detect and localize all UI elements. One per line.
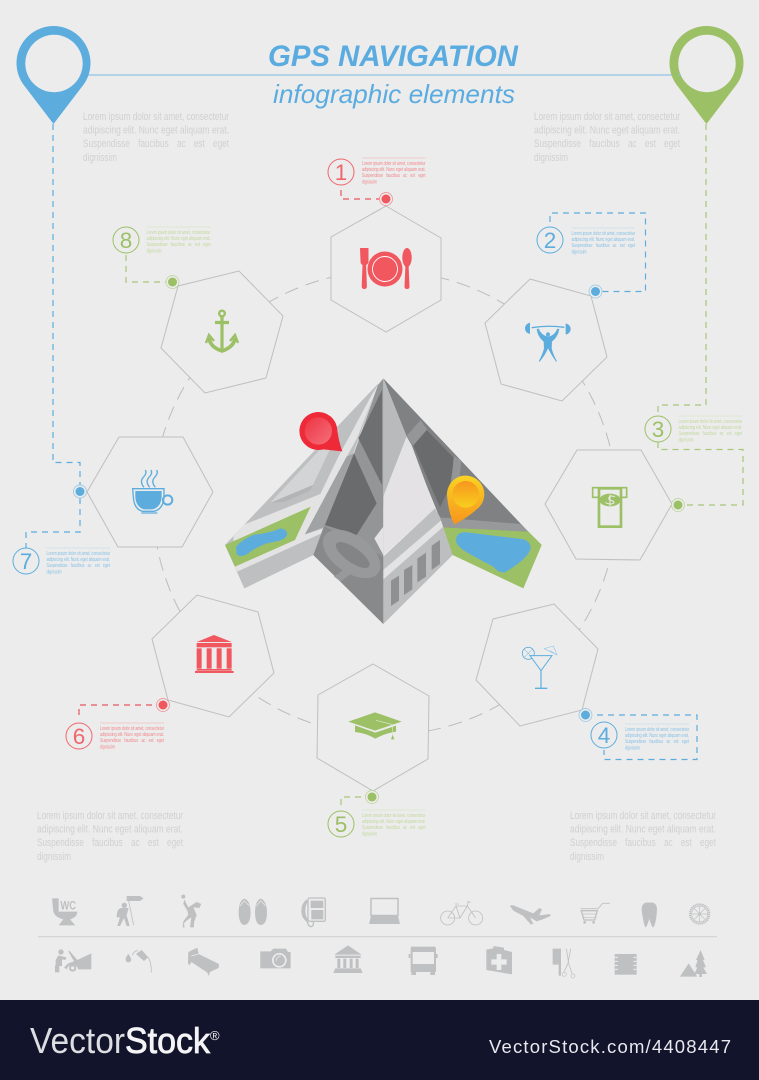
icon: bank xyxy=(333,945,363,973)
hexagon 4 xyxy=(476,604,598,726)
icon: coffee cup xyxy=(133,470,172,513)
hexagon 3 xyxy=(545,450,672,560)
icon row: top xyxy=(52,895,709,927)
caption 7: Suspendisse faucibus ac est eget xyxy=(46,563,110,569)
number 4 xyxy=(591,722,617,748)
center left face xyxy=(305,378,389,624)
marker 1 xyxy=(380,192,392,206)
number 7 xyxy=(13,548,39,574)
caption 4 xyxy=(625,724,689,752)
caption 2 xyxy=(572,228,635,256)
icon: bicycle xyxy=(441,901,483,925)
marker 2 xyxy=(589,285,602,298)
caption 7 xyxy=(46,548,110,576)
footer logo: Stock xyxy=(125,1020,211,1061)
icon: camera xyxy=(260,949,291,968)
hexagon 6 xyxy=(152,595,274,717)
caption 6: Lorem ipsum dolor sit amet, consectetur xyxy=(100,726,164,732)
text block: bottom right: dignissim xyxy=(570,851,604,863)
caption 5: Lorem ipsum dolor sit amet, consectetur xyxy=(362,813,426,819)
icon: plate and cutlery xyxy=(360,248,412,289)
caption 7: adipiscing elit. Nunc eget aliquam erat. xyxy=(46,557,110,563)
text block: top right: dignissim xyxy=(534,152,568,164)
connector 4 xyxy=(586,715,697,760)
hexagon 8 xyxy=(161,271,283,393)
number 8: 8 xyxy=(120,228,132,253)
central folded map xyxy=(225,378,542,624)
icon: anchor xyxy=(206,311,238,351)
text block: bottom right: adipiscing elit. Nunc eget aliquam erat. xyxy=(570,824,716,836)
hexagon 2 xyxy=(485,279,607,401)
marker 5 xyxy=(366,790,378,804)
number 5: 5 xyxy=(335,812,347,837)
icon: WC xyxy=(52,898,77,925)
number 2 xyxy=(537,227,563,253)
header rule xyxy=(86,74,681,76)
number 7: 7 xyxy=(20,549,32,574)
connector 7 lower xyxy=(26,498,80,548)
caption 5: Suspendisse faucibus ac est eget xyxy=(362,825,426,831)
number 6: 6 xyxy=(73,724,85,749)
caption 8: dignissim xyxy=(146,248,162,254)
icon: comb and scissors xyxy=(553,949,575,978)
caption 2: dignissim xyxy=(572,250,586,256)
icon: weightlifter xyxy=(525,323,571,362)
icon: fuel nozzle xyxy=(126,950,151,973)
caption 3: dignissim xyxy=(678,438,694,444)
marker 7 xyxy=(74,485,86,498)
caption 6: Suspendisse faucibus ac est eget xyxy=(100,738,164,744)
caption 8: Lorem ipsum dolor sit amet, consectetur xyxy=(146,230,211,236)
text block: top right: Lorem ipsum dolor sit amet, consectetur xyxy=(534,111,680,123)
icon: discus thrower xyxy=(181,895,201,927)
icon: WC: WC xyxy=(60,899,76,913)
step 5: school xyxy=(317,664,429,838)
marker 4 xyxy=(579,708,592,722)
icon: airplane xyxy=(510,905,551,924)
icon: laptop xyxy=(369,898,400,924)
text block: bottom left: adipiscing elit. Nunc eget aliquam erat. xyxy=(37,824,183,836)
icon: yellow pin xyxy=(447,476,484,524)
step 7: cafe xyxy=(13,124,213,576)
connector 2 xyxy=(550,213,646,292)
icon: tooth xyxy=(642,902,657,927)
marker 8 xyxy=(166,276,179,288)
connector 3 lower xyxy=(658,442,743,505)
caption 3 xyxy=(678,416,742,444)
caption 1: Lorem ipsum dolor sit amet, consectetur xyxy=(362,161,426,167)
step 8: harbour xyxy=(113,227,283,393)
caption 1: Suspendisse faucibus ac est eget xyxy=(362,173,426,179)
caption 8: Suspendisse faucibus ac est eget xyxy=(146,242,211,248)
caption 6: dignissim xyxy=(100,744,115,750)
footer logo: ® xyxy=(210,1028,220,1043)
text block: top right: adipiscing elit. Nunc eget aliquam erat. xyxy=(534,124,680,136)
text block: top left: adipiscing elit. Nunc eget aliquam erat. xyxy=(83,124,229,136)
caption 4: Suspendisse faucibus ac est eget xyxy=(625,739,689,745)
caption 2: Suspendisse faucibus ac est eget xyxy=(572,243,635,249)
caption 4: dignissim xyxy=(625,746,640,752)
icon: tent and tree xyxy=(680,950,707,977)
number 8 xyxy=(113,227,139,253)
icon: compass dial xyxy=(690,904,709,924)
icon: blue map pin xyxy=(16,26,90,124)
text block: top left: Lorem ipsum dolor sit amet, consectetur xyxy=(83,111,229,123)
icon: bed xyxy=(188,948,219,976)
marker 6 xyxy=(156,698,170,712)
connector 3 upper xyxy=(658,124,706,416)
connector 8 xyxy=(126,255,173,282)
icon: bus xyxy=(409,947,438,975)
caption 4: Lorem ipsum dolor sit amet, consectetur xyxy=(625,727,689,733)
connector 6 xyxy=(79,705,163,718)
connector 5 xyxy=(341,797,372,807)
icon: telephone xyxy=(301,898,325,927)
text block: top right xyxy=(534,111,680,164)
icon: graduation cap xyxy=(348,712,402,739)
hexagon 5 xyxy=(317,664,429,791)
caption 1: dignissim xyxy=(362,180,377,186)
number 3 xyxy=(645,416,671,442)
number 3: 3 xyxy=(652,417,664,442)
icon: hiker with signpost xyxy=(117,896,144,926)
caption 7: dignissim xyxy=(46,570,62,576)
caption 5: dignissim xyxy=(362,832,377,838)
marker 3 xyxy=(672,498,684,512)
title: GPS NAVIGATION xyxy=(268,40,519,73)
caption 5 xyxy=(362,810,426,838)
footer image id: VectorStock.com/4408447 xyxy=(489,1036,731,1057)
right face xyxy=(383,378,542,624)
text block: bottom left xyxy=(37,810,183,863)
icon: flip-flops xyxy=(239,899,267,925)
number 1 xyxy=(328,159,354,185)
hexagon 1 xyxy=(331,206,441,332)
caption 4: adipiscing elit. Nunc eget aliquam erat. xyxy=(625,733,689,739)
connector 1 xyxy=(341,190,386,199)
caption 6 xyxy=(100,723,164,750)
left wing xyxy=(225,383,378,588)
text block: top left xyxy=(83,111,229,164)
text block: top left: Suspendisse faucibus ac est eget xyxy=(83,138,229,150)
text block: bottom left: Lorem ipsum dolor sit amet, consectetur xyxy=(37,810,183,822)
icon: red pin xyxy=(299,412,342,451)
footer logo xyxy=(30,1020,220,1061)
caption 2: adipiscing elit. Nunc eget aliquam erat. xyxy=(572,237,635,243)
number 5 xyxy=(328,811,354,837)
caption 5: adipiscing elit. Nunc eget aliquam erat. xyxy=(362,819,426,825)
caption 1: adipiscing elit. Nunc eget aliquam erat. xyxy=(362,167,426,173)
dashed orbit ring xyxy=(153,271,617,735)
icon: cash machine xyxy=(593,488,627,527)
text block: top right: Suspendisse faucibus ac est eget xyxy=(534,138,680,150)
text block: bottom right xyxy=(570,810,716,863)
caption 1 xyxy=(362,158,426,186)
step 6: bank xyxy=(66,595,274,750)
caption 8 xyxy=(146,227,211,254)
icon: film strip xyxy=(615,954,637,975)
connector 7 upper xyxy=(53,124,80,485)
hexagon 7 xyxy=(87,437,213,547)
subtitle: infographic elements xyxy=(273,79,515,109)
text block: top left: dignissim xyxy=(83,152,117,164)
caption 2: Lorem ipsum dolor sit amet, consectetur xyxy=(572,231,635,237)
text block: bottom left: dignissim xyxy=(37,851,71,863)
icon: car mechanic xyxy=(55,949,91,972)
icon: first aid kit xyxy=(486,946,512,974)
caption 6: adipiscing elit. Nunc eget aliquam erat. xyxy=(100,732,164,738)
number 1: 1 xyxy=(335,160,347,185)
icon row: bottom xyxy=(55,945,707,978)
step 2: gym xyxy=(485,213,646,401)
number 6 xyxy=(66,723,92,749)
step 4: bar xyxy=(476,604,697,760)
number 2: 2 xyxy=(544,228,556,253)
footer bar xyxy=(0,1000,759,1080)
title block xyxy=(86,40,681,109)
icon: green map pin xyxy=(670,26,744,124)
icon: bank xyxy=(195,635,234,673)
icon: cocktail xyxy=(522,646,557,688)
caption 7: Lorem ipsum dolor sit amet, consectetur xyxy=(46,551,110,557)
number 4: 4 xyxy=(598,723,610,748)
caption 8: adipiscing elit. Nunc eget aliquam erat. xyxy=(146,236,210,242)
divider between icon rows xyxy=(38,936,717,938)
step 1: restaurant xyxy=(328,158,441,332)
footer logo: Vector xyxy=(30,1020,125,1061)
text block: bottom left: Suspendisse faucibus ac est eget xyxy=(37,837,183,849)
icon: shopping cart xyxy=(581,903,610,924)
step 3: ATM xyxy=(545,124,743,560)
